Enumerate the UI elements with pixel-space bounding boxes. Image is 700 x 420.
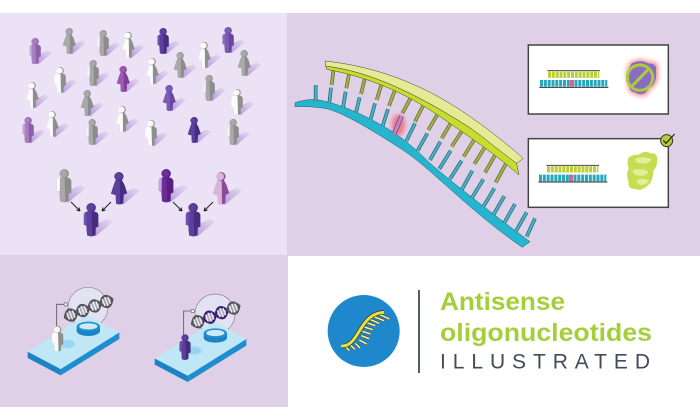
box: blocked mutant protein — [528, 45, 668, 114]
panel: divider strip — [287, 13, 289, 256]
inset boxes: duplex outcomes — [528, 45, 675, 207]
title: ILLUSTRATED — [440, 350, 650, 374]
title — [440, 288, 652, 374]
cyan rungs — [316, 85, 535, 237]
genetic test: affected person — [155, 294, 246, 382]
title: oligonucleotides — [440, 319, 652, 347]
cyan target strand — [295, 99, 530, 247]
panel: genetic testing background — [0, 255, 288, 407]
crowd of people figures — [22, 27, 261, 146]
divider — [418, 290, 420, 373]
green rungs — [332, 68, 507, 183]
mismatch highlight — [392, 114, 405, 136]
panel: antisense binding background — [288, 13, 700, 256]
family two: parents and child — [159, 169, 242, 237]
logo circle with strand — [328, 295, 400, 367]
panel: population background — [0, 13, 287, 255]
antisense duplex strand illustration — [295, 61, 535, 247]
yellow antisense strand — [326, 66, 519, 175]
family one: parents and child — [57, 169, 140, 237]
box: functional protein — [528, 134, 675, 207]
icon: check badge — [661, 134, 675, 147]
genetic test: unaffected person — [28, 287, 119, 375]
title: Antisense — [440, 288, 565, 316]
